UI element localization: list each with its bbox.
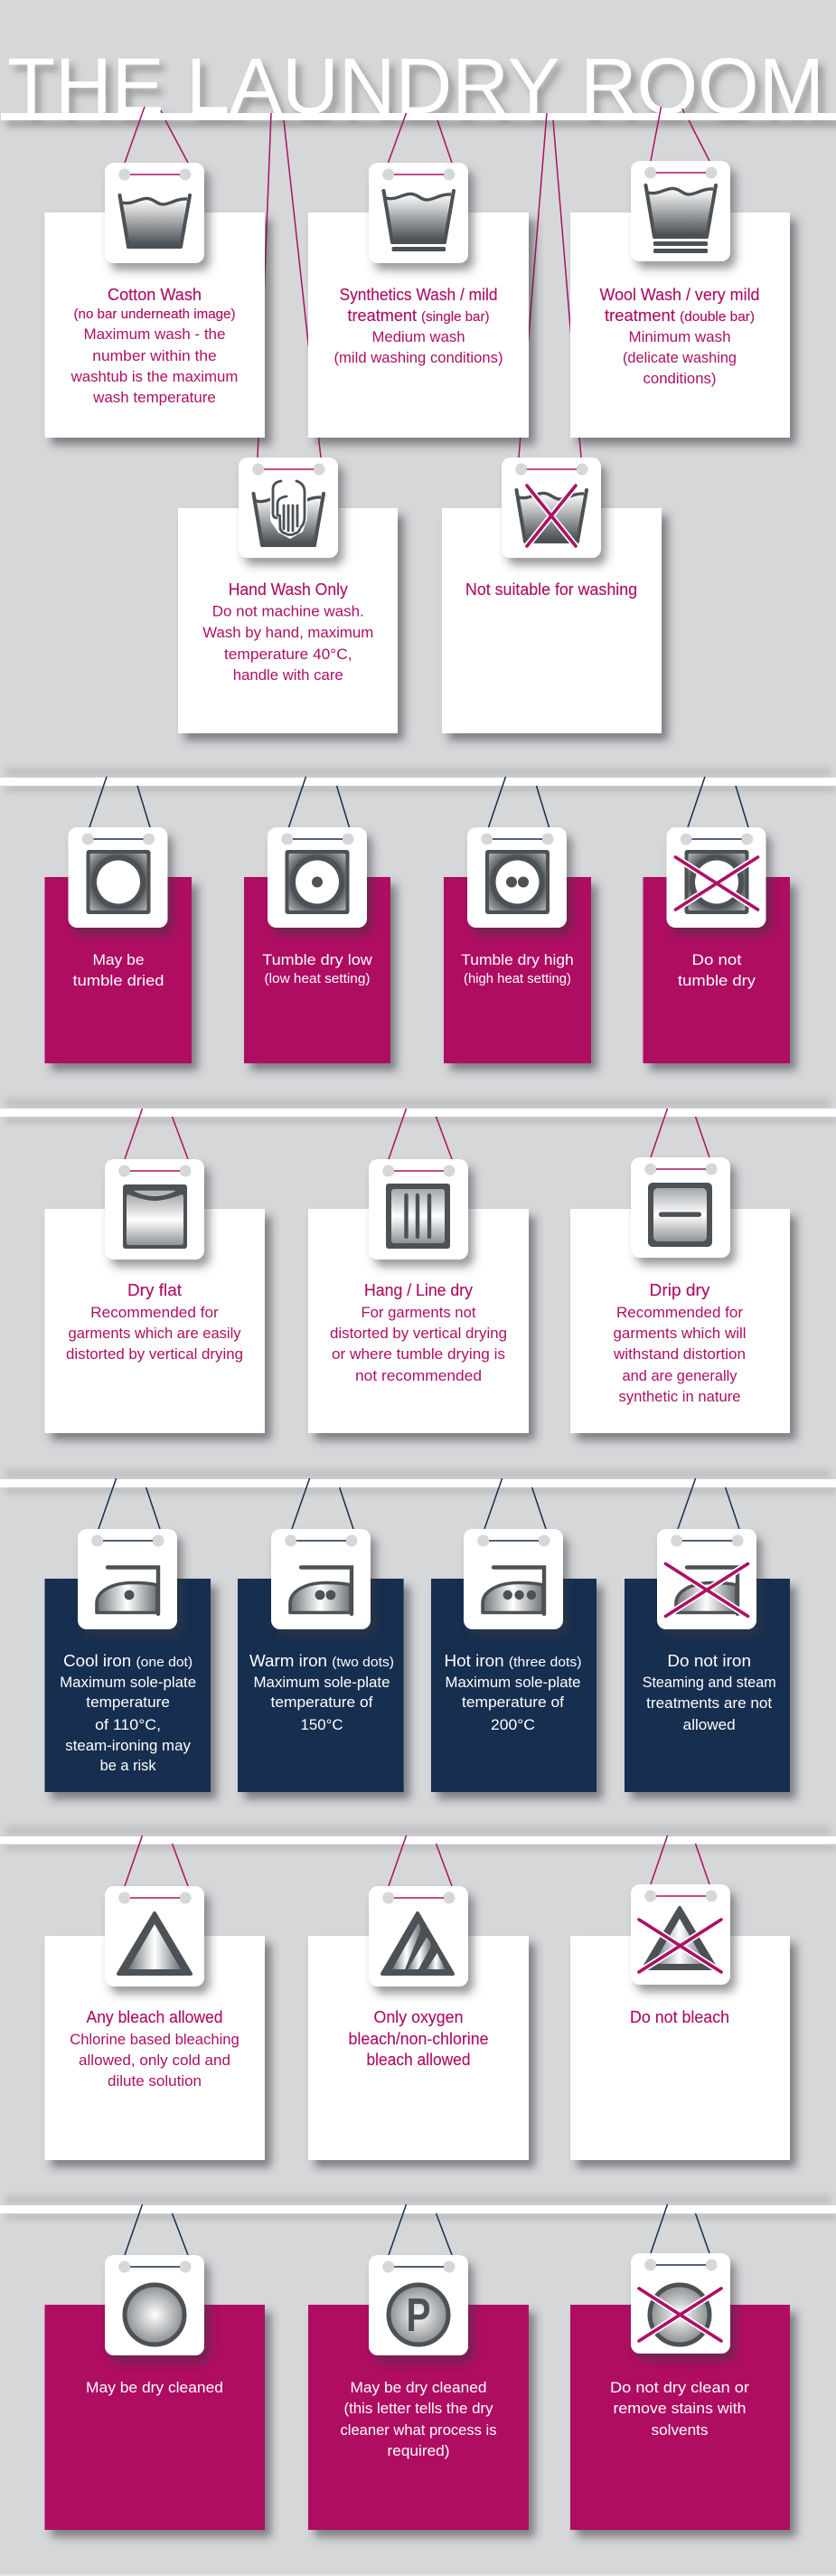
- text: temperature of: [462, 1694, 564, 1711]
- text: not recommended: [355, 1367, 482, 1384]
- card: [431, 1579, 596, 1792]
- text: synthetic in nature: [618, 1388, 741, 1405]
- text: bleach/non-chlorine: [349, 2030, 488, 2048]
- strings: [89, 777, 150, 827]
- text: temperature of: [271, 1694, 373, 1711]
- text: Hot iron (three dots): [445, 1652, 582, 1670]
- panel: hang line dry: [308, 1109, 529, 1433]
- strings: [389, 1835, 452, 1886]
- hang tag: [631, 2253, 730, 2354]
- text: Do not dry clean or: [610, 2379, 749, 2396]
- icon: crossed iron: [665, 1564, 748, 1617]
- text: [349, 2008, 488, 2069]
- text: Tumble dry high: [461, 951, 574, 968]
- panel: cool iron: [45, 1478, 211, 1792]
- hang tag: [467, 827, 567, 928]
- text: Only oxygen: [374, 2008, 463, 2026]
- panel: warm iron: [238, 1478, 404, 1792]
- strings: [678, 1478, 739, 1529]
- shelf: tumble drying: [0, 767, 836, 792]
- text: [610, 2379, 749, 2439]
- text: withstand distortion: [613, 1345, 746, 1363]
- text: [262, 951, 373, 986]
- text: [340, 2379, 497, 2459]
- strings: [389, 2204, 452, 2255]
- hang tag: [667, 827, 766, 928]
- hang tag: [69, 827, 168, 928]
- text: [643, 1652, 776, 1733]
- card: [308, 1936, 529, 2160]
- text: Do not machine wash.: [212, 603, 364, 620]
- card: [308, 1209, 529, 1433]
- strings: [651, 1835, 709, 1884]
- text: washtub is the maximum: [70, 368, 238, 385]
- text: Recommended for: [616, 1304, 743, 1321]
- text: Wash by hand, maximum: [202, 624, 373, 641]
- panel: synthetics wash: [308, 113, 529, 438]
- hang tag: [369, 2255, 468, 2355]
- panel: drip dry: [570, 1109, 790, 1433]
- hang tag: [369, 163, 468, 263]
- text: Recommended for: [90, 1304, 219, 1321]
- icon: crossed tumble dryer: [676, 850, 757, 914]
- text: [70, 286, 238, 406]
- text: distorted by vertical drying: [330, 1325, 507, 1342]
- panel: do not dry clean: [570, 2204, 790, 2530]
- strings: [488, 777, 550, 827]
- strings: [519, 113, 581, 458]
- hang tag: [631, 161, 730, 261]
- text: [66, 1281, 243, 1363]
- text: 150°C: [300, 1716, 343, 1733]
- panel: cotton wash: [45, 107, 265, 438]
- card: [238, 1579, 404, 1792]
- panel: only oxygen bleach: [308, 1835, 529, 2160]
- text: Medium wash: [372, 328, 465, 345]
- strings: [651, 2204, 709, 2253]
- panel: hot iron: [431, 1478, 596, 1792]
- strings: [389, 113, 452, 163]
- text: Wool Wash / very mild: [600, 286, 759, 304]
- text: and are generally: [622, 1367, 737, 1384]
- icon: circle with P: P: [407, 2289, 430, 2342]
- icon: circle: [125, 2285, 184, 2345]
- card: [45, 1936, 265, 2160]
- panel: may be tumble dried: [45, 777, 192, 1063]
- text: be a risk: [100, 1757, 156, 1774]
- text: [461, 951, 574, 986]
- panel: do not iron: [625, 1478, 790, 1792]
- shelf: bleaching: [0, 1826, 836, 1850]
- text: dilute solution: [108, 2072, 202, 2090]
- text: Maximum wash - the: [83, 326, 225, 343]
- panel: do not tumble dry: [643, 777, 790, 1063]
- icon: line dry: [386, 1184, 450, 1249]
- text: Maximum sole-plate: [60, 1674, 196, 1691]
- text: wash temperature: [92, 389, 216, 406]
- text: remove stains with: [613, 2400, 747, 2417]
- card: [244, 877, 390, 1063]
- strings: [99, 1478, 160, 1529]
- card: [570, 1209, 790, 1433]
- text: (no bar underneath image): [74, 307, 235, 322]
- text: Steaming and steam: [643, 1674, 776, 1691]
- text: [202, 580, 373, 684]
- panel: do not bleach: [570, 1835, 790, 2160]
- card: [570, 2305, 790, 2530]
- text: conditions): [643, 370, 716, 387]
- hang tag: [78, 1529, 177, 1629]
- text: required): [387, 2442, 450, 2459]
- strings: [651, 107, 709, 161]
- hang tag: [369, 1159, 468, 1260]
- text: bleach allowed: [367, 2051, 470, 2069]
- text: garments which will: [613, 1325, 747, 1342]
- text: [678, 951, 756, 989]
- icon: crossed washtub: [517, 486, 587, 546]
- panel: may be dry cleaned with letter: [308, 2204, 529, 2530]
- text: Minimum wash: [629, 328, 730, 345]
- icon: washtub single bar: [383, 191, 454, 251]
- icon: tumble dryer two dots: [485, 850, 550, 914]
- icon: washtub double bar: [645, 185, 716, 253]
- strings: [292, 1478, 353, 1529]
- card: [308, 212, 529, 438]
- hang tag: [271, 1529, 371, 1629]
- hang tag: [268, 827, 367, 928]
- shelf: natural drying: [0, 1098, 836, 1123]
- hang tag: [105, 163, 204, 263]
- icon: iron one dot: [97, 1568, 158, 1614]
- text: Hang / Line dry: [364, 1281, 473, 1299]
- text: Do not iron: [667, 1652, 751, 1670]
- strings: [651, 1109, 709, 1157]
- hang tag: [105, 1159, 204, 1260]
- text: Hand Wash Only: [229, 580, 348, 599]
- card: [643, 877, 790, 1063]
- text: [72, 951, 164, 989]
- text: [249, 1652, 394, 1733]
- strings: [289, 777, 349, 827]
- text: Maximum sole-plate: [445, 1674, 580, 1691]
- text: number within the: [92, 347, 217, 364]
- icon: triangle: [118, 1913, 191, 1974]
- text: Do not: [692, 951, 742, 968]
- strings: [125, 1109, 188, 1159]
- text: or where tumble drying is: [332, 1345, 505, 1363]
- card: [442, 508, 662, 733]
- panel: may be dry cleaned: [45, 2204, 265, 2530]
- strings: [389, 1109, 452, 1159]
- text: (low heat setting): [264, 971, 371, 986]
- icon: washtub: [119, 195, 190, 247]
- text: allowed, only cold and: [79, 2052, 230, 2069]
- hang tag: [369, 1886, 468, 1986]
- icon: drip dry: [648, 1183, 712, 1247]
- icon: striped triangle: [382, 1913, 453, 1974]
- text: (mild washing conditions): [334, 349, 503, 366]
- shelf: dry cleaning: [0, 2194, 836, 2220]
- text: (delicate washing: [623, 349, 737, 366]
- strings: [258, 113, 321, 458]
- card: [570, 1936, 790, 2160]
- icon: crossed circle: [639, 2285, 721, 2345]
- panel: not suitable for washing: [442, 113, 662, 733]
- text: Cotton Wash: [108, 286, 202, 304]
- icon: circle with P: [389, 2285, 448, 2345]
- card: [45, 1579, 211, 1792]
- hang tag: [464, 1529, 563, 1629]
- text: Warm iron (two dots): [249, 1652, 394, 1670]
- card: [45, 212, 265, 438]
- shelf: ironing: [0, 1468, 836, 1494]
- strings: [125, 107, 188, 163]
- hang tag: [657, 1529, 756, 1629]
- text: [60, 1652, 196, 1774]
- text: [334, 286, 503, 366]
- hang tag: [631, 1884, 730, 1985]
- strings: [125, 1835, 188, 1886]
- icon: hand in washtub: [253, 481, 324, 545]
- card: [178, 508, 398, 733]
- text: allowed: [683, 1716, 736, 1733]
- hang tag: [105, 2255, 204, 2355]
- strings: [688, 777, 748, 827]
- text: [445, 1652, 582, 1733]
- text: handle with care: [233, 666, 343, 684]
- card: [45, 2305, 265, 2530]
- text: [330, 1281, 507, 1384]
- card: [570, 212, 790, 438]
- hang tag: [239, 458, 338, 558]
- card: [45, 877, 192, 1063]
- text: May be dry cleaned: [86, 2379, 223, 2396]
- icon: crossed triangle: [639, 1908, 721, 1972]
- text: 200°C: [491, 1716, 535, 1733]
- panel: tumble dry low: [244, 777, 390, 1063]
- card: [625, 1579, 790, 1792]
- panel: dry flat: [45, 1109, 265, 1433]
- text: treatment (single bar): [347, 307, 490, 325]
- text: Drip dry: [649, 1281, 710, 1299]
- text: Dry flat: [127, 1281, 182, 1299]
- panel: tumble dry high: [444, 777, 591, 1063]
- text: Cool iron (one dot): [63, 1652, 193, 1670]
- text: temperature 40°C,: [224, 646, 352, 663]
- icon: tumble dryer: [87, 850, 150, 914]
- text: Synthetics Wash / mild: [340, 286, 497, 304]
- text: Tumble dry low: [262, 951, 373, 968]
- hang tag: [631, 1157, 730, 1258]
- text: [613, 1281, 747, 1405]
- text: Chlorine based bleaching: [70, 2031, 240, 2048]
- text: temperature: [86, 1694, 170, 1711]
- strings: [125, 2204, 188, 2255]
- text: Not suitable for washing: [465, 580, 637, 599]
- icon: iron three dots: [483, 1568, 544, 1614]
- text: Do not bleach: [630, 2008, 729, 2026]
- card: [45, 1209, 265, 1433]
- text: cleaner what process is: [340, 2421, 497, 2439]
- hang tag: [502, 458, 601, 558]
- card: [308, 2305, 529, 2530]
- panel: wool wash: [570, 107, 790, 438]
- text: Any bleach allowed: [87, 2008, 222, 2026]
- card: [444, 877, 591, 1063]
- text: tumble dry: [678, 972, 756, 989]
- text: May be dry cleaned: [351, 2379, 486, 2396]
- text: tumble dried: [72, 972, 164, 989]
- text: [70, 2008, 240, 2090]
- strings: [484, 1478, 546, 1529]
- hang tag: [105, 1886, 204, 1986]
- icon: iron two dots: [290, 1568, 352, 1614]
- text: distorted by vertical drying: [66, 1345, 243, 1363]
- text: May be: [92, 951, 145, 968]
- text: (high heat setting): [464, 971, 571, 986]
- text: treatment (double bar): [605, 307, 755, 325]
- icon: tumble dryer one dot: [286, 850, 349, 914]
- panel: hand wash only: [178, 113, 398, 733]
- text: [600, 286, 759, 387]
- text: Maximum sole-plate: [253, 1674, 390, 1691]
- panel: any bleach allowed: [45, 1835, 265, 2160]
- icon: dry flat: [123, 1184, 187, 1249]
- text: of 110°C,: [95, 1716, 161, 1733]
- text: For garments not: [362, 1304, 476, 1321]
- text: (this letter tells the dry: [343, 2400, 493, 2417]
- title: THE LAUNDRY ROOM: [7, 42, 824, 130]
- text: garments which are easily: [69, 1325, 241, 1342]
- text: steam-ironing may: [65, 1737, 191, 1754]
- text: treatments are not: [646, 1694, 772, 1712]
- text: solvents: [651, 2421, 709, 2439]
